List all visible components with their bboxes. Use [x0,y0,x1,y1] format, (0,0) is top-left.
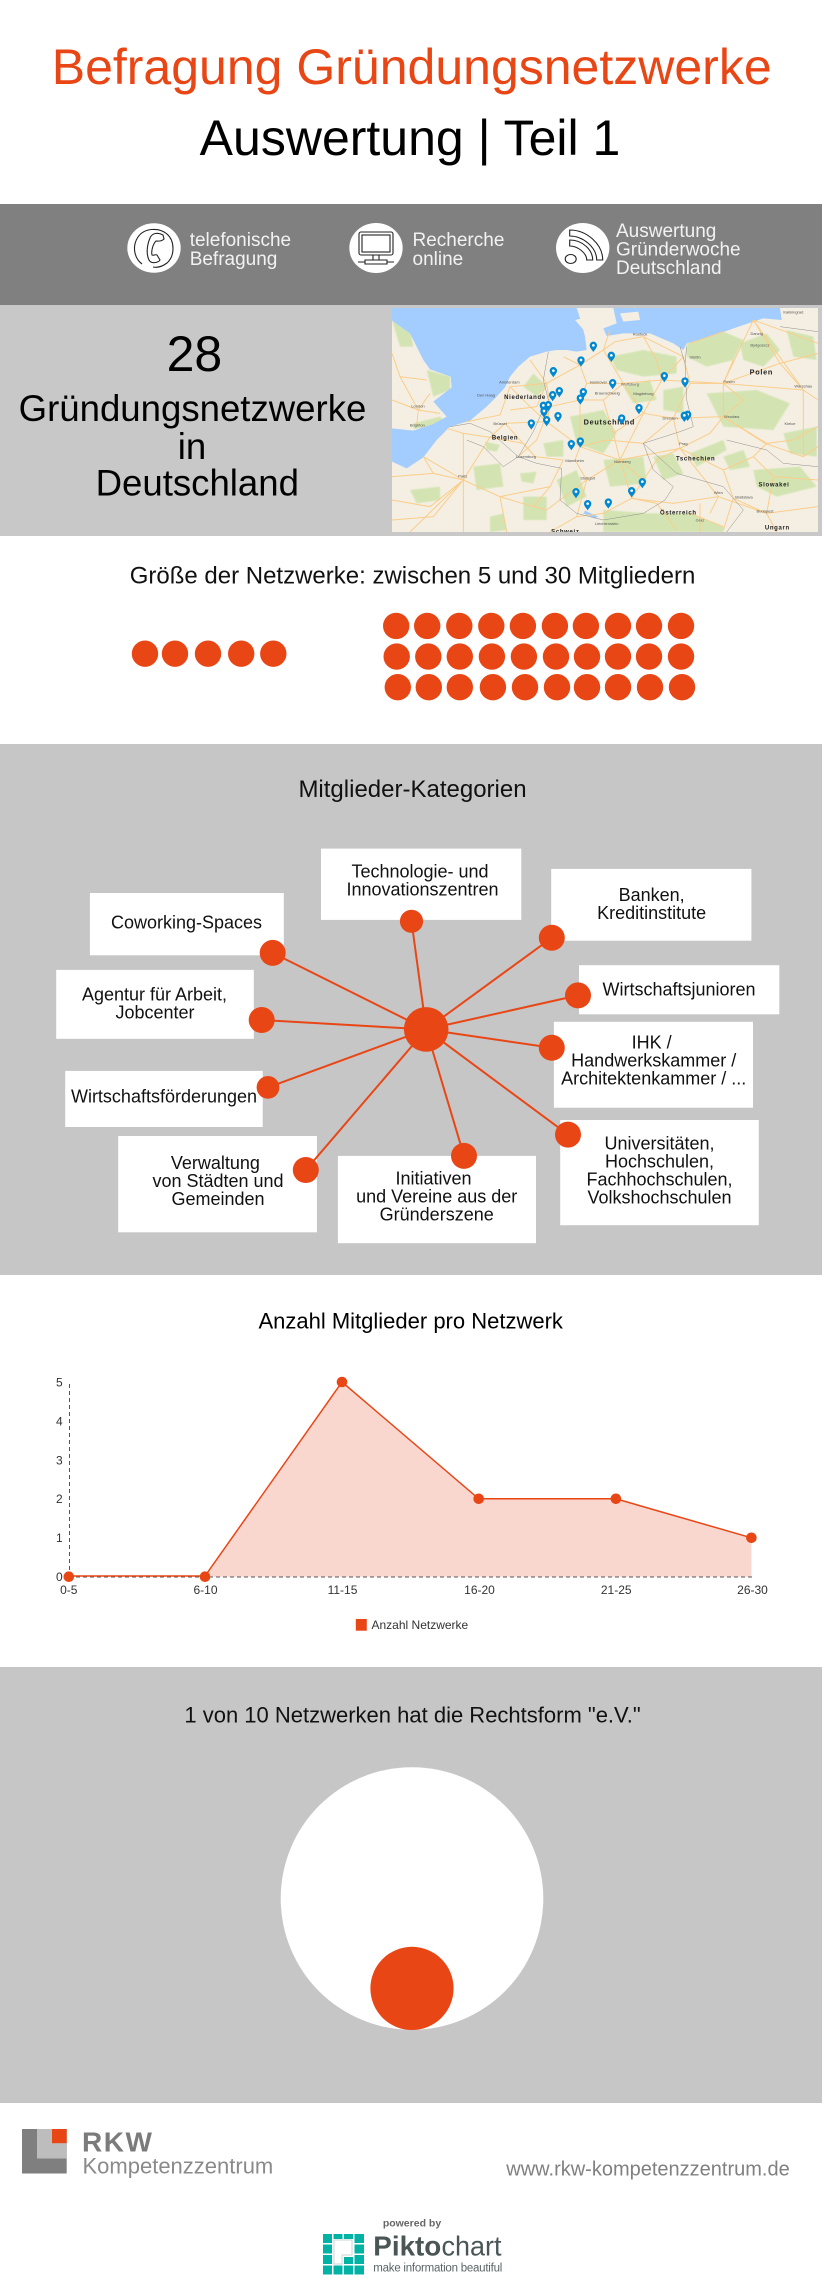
map of Germany: Kaliningrad [783,309,803,314]
category labels: Handwerkskammer / [571,1051,736,1071]
text: telefonische Befragung: telefonische [190,230,291,251]
heading: members per network: Anzahl Mitglieder pro Netzwerk [258,1308,564,1333]
category labels: Technologie- und [351,861,489,881]
y axis labels: 5 [56,1376,63,1390]
map of Germany: Wien [714,490,723,495]
x axis labels: 21-25 [601,1583,632,1597]
category labels: Kreditinstitute [597,903,706,923]
category labels: Gründerszene [380,1204,494,1224]
y axis labels [56,1376,63,1584]
map of Germany: Luxemburg [516,454,536,459]
big number and caption: Gründungsnetzwerke [19,388,366,429]
text: Recherche online: Recherche [412,230,504,251]
map of Germany: Stettin [689,354,701,359]
text: Recherche online [412,230,504,270]
map of Germany: Stuttgart [580,476,596,481]
network nodes [249,910,591,1183]
circle: share [370,1947,454,2030]
map pins [528,342,691,510]
logo: Piktochart: Pikto [373,2231,441,2262]
big number and caption [19,326,366,504]
map of Germany: Paris [458,473,467,478]
map of Germany: Bratislava [735,494,754,499]
map of Germany: Graz [696,518,704,523]
category labels: Wirtschaftsjunioren [602,979,756,999]
title: Auswertung | Teil 1 [200,110,620,166]
map of Germany: Schweiz [551,529,580,535]
panel: member categories [0,744,822,1275]
icon: mosaic [323,2234,364,2274]
heading: legal form: 1 von 10 Netzwerken hat die Rechtsform "e.V." [184,1703,641,1728]
logo: RKW Kompetenzzentrum: RKW [82,2127,153,2158]
category labels: Fachhochschulen, [586,1170,733,1190]
map of Germany: Braunschweig [595,391,620,396]
title: Befragung Gründungsnetzwerke [52,39,772,95]
text: Auswertung Gründerwoche Deutschland [616,221,741,279]
map of Germany: Liechtenstein [595,521,618,526]
category labels: von Städten und [152,1171,284,1191]
category labels: Gemeinden [171,1189,265,1209]
category labels: Jobcenter [115,1002,195,1022]
map of Germany: Polen [750,367,773,376]
big number and caption: Deutschland [96,462,299,504]
map of Germany: Rostock [633,332,647,337]
map of Germany: Wolfsburg [621,382,639,387]
map of Germany: Ungarn [765,526,790,532]
text: Auswertung Gründerwoche Deutschland: Auswertung [616,221,716,242]
x axis labels: 26-30 [737,1583,768,1597]
map of Germany: Warschau [794,383,812,388]
map of Germany: Dresden [662,415,678,420]
map of Germany: Brighton [410,423,425,428]
category labels: Architektenkammer / ... [561,1069,746,1089]
map of Germany: Posen [723,379,735,384]
circle: whole [281,1767,543,2030]
map of Germany: Magdeburg [633,391,653,396]
text: Auswertung Gründerwoche Deutschland: Gründerwoche [616,240,741,260]
y axis labels: 4 [56,1414,63,1428]
panel: legal form [0,1667,822,2103]
map of Germany: Tschechien [676,457,715,463]
big number and caption: 28 [167,326,222,382]
category labels: Hochschulen, [605,1152,714,1172]
category labels: Agentur für Arbeit, [82,985,227,1005]
text: Auswertung Gründerwoche Deutschland: Deutschland [616,258,722,279]
x axis labels: 6-10 [193,1583,218,1597]
map of Germany [392,308,818,535]
map of Germany: Budapest [757,509,774,514]
x axis labels: 11-15 [328,1583,358,1597]
map of Germany: Hannover [590,379,608,384]
category labels: Coworking-Spaces [111,912,262,932]
logo: Piktochart [323,2218,502,2275]
area chart [56,1376,768,1632]
map of Germany: Slowakei [758,483,790,489]
x axis labels: 16-20 [464,1583,495,1597]
panel: methods band [0,204,822,305]
map of Germany: Amsterdam [499,380,520,385]
category labels: Innovationszentren [346,879,499,899]
big number and caption: in [178,426,206,467]
map of Germany: Mannheim [565,458,585,463]
map of Germany: Niederlande [504,395,546,401]
text: Recherche online: online [412,249,463,270]
map of Germany: Wrocław [724,414,739,419]
category labels: Volkshochschulen [587,1188,732,1208]
map of Germany: Deutschland [584,418,635,427]
dots: 30 members [383,613,695,700]
y axis labels: 0 [56,1570,63,1584]
map of Germany: Brüssel [493,421,507,426]
category labels: Verwaltung [171,1153,260,1173]
y axis labels: 1 [56,1531,63,1545]
map of Germany: Bydgoszcz [750,343,770,348]
x axis labels: 0-5 [60,1583,78,1597]
x axis labels [60,1583,768,1597]
category boxes [56,849,779,1243]
map of Germany: Österreich [660,510,697,517]
heading: Mitglieder-Kategorien: Mitglieder-Kategorien [298,776,527,803]
y axis labels: 3 [56,1454,63,1468]
map of Germany: Prag [679,441,688,446]
map of Germany: Belgien [492,436,518,442]
panel: 28 networks [0,305,822,536]
map of Germany: Nürnberg [614,459,631,464]
text: telefonische Befragung [190,230,291,270]
icon: telephone [127,223,181,273]
icon: rss feed [556,223,609,273]
chart legend: Anzahl Netzwerke [372,1618,469,1632]
category labels: IHK / [632,1033,672,1053]
logo: RKW Kompetenzzentrum: Kompetenzzentrum [82,2153,273,2178]
y axis labels: 2 [56,1492,63,1506]
title [52,39,772,166]
map of Germany: Kielce [785,421,796,426]
logo: Piktochart: make information beautiful [373,2263,502,2275]
website url: www.rkw-kompetenzzentrum.de [505,2158,790,2180]
category labels: und Vereine aus der [356,1187,517,1207]
network spokes [262,921,578,1170]
category labels: Wirtschaftsförderungen [71,1086,257,1106]
map of Germany: Den Haag [477,392,495,397]
dots: 5 members [132,640,286,667]
heading: network size: Größe der Netzwerke: zwischen 5 und 30 Mitgliedern [130,562,695,590]
text: telefonische Befragung: Befragung [190,249,277,270]
category labels: Universitäten, [604,1134,715,1154]
category labels: Banken, [619,885,685,905]
map of Germany: Danzig [750,331,763,336]
map of Germany: London [411,403,425,408]
logo: RKW Kompetenzzentrum [22,2127,273,2178]
icon: computer [349,223,403,273]
category labels [71,861,756,1224]
logo: Piktochart: powered by [383,2218,441,2230]
category labels: Initiativen [395,1169,472,1189]
logo: Piktochart: chart [442,2231,502,2262]
